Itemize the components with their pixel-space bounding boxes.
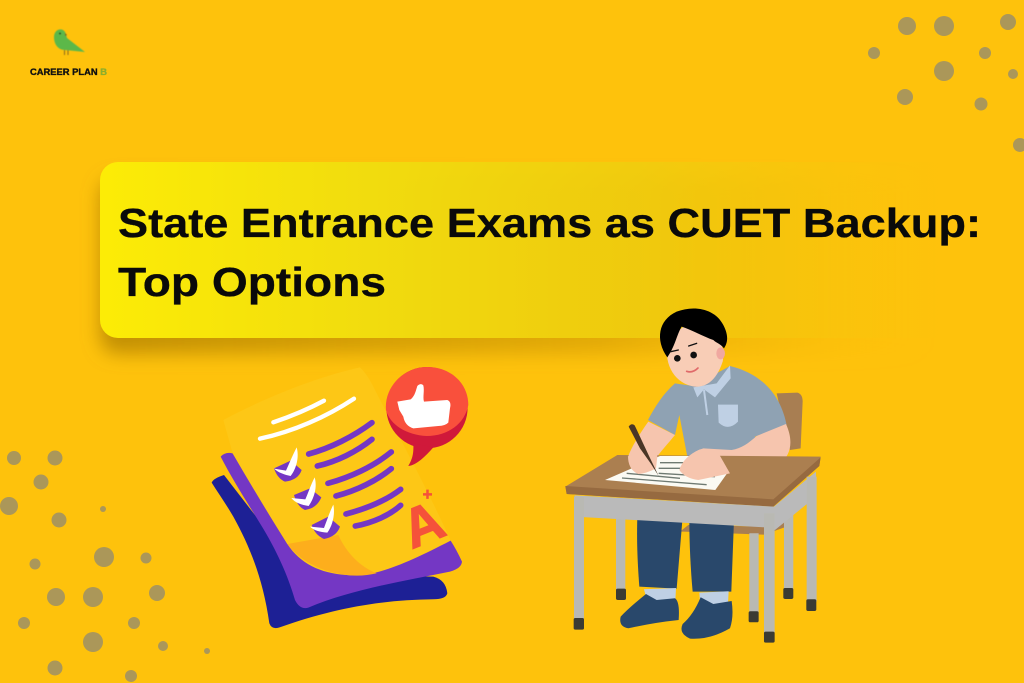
decorative dots: bottom left [0, 450, 210, 682]
panel fill [100, 162, 1000, 338]
paper [605, 456, 727, 490]
illustration: student at desk [565, 308, 821, 643]
legs [620, 517, 734, 639]
logo wordmark: CAREER PLAN B [30, 67, 107, 78]
title [118, 200, 981, 305]
head [667, 323, 723, 387]
title panel [100, 162, 1000, 354]
desk top [565, 455, 821, 507]
back desk leg [616, 513, 625, 590]
left arm [628, 422, 675, 474]
thumbs-up speech bubble [386, 367, 468, 466]
collar [693, 365, 731, 397]
illustration: checklist paper: + [423, 485, 433, 504]
face [671, 343, 698, 372]
chair [680, 393, 803, 622]
letter grade A+: A [393, 488, 453, 561]
pen [629, 424, 659, 476]
sheet fold [287, 535, 377, 576]
title: State Entrance Exams as CUET Backup: [118, 200, 981, 246]
title: Top Options [118, 259, 386, 305]
white heading lines [260, 399, 354, 439]
hair [660, 308, 727, 357]
middle sheet: purple [221, 453, 462, 608]
right arm [680, 424, 790, 480]
desk apron and front legs [575, 472, 816, 530]
front sheet: yellow [223, 367, 451, 575]
right hand [679, 449, 730, 480]
decorative dots: top right [868, 14, 1024, 152]
logo: Career Plan B [30, 29, 107, 78]
shirt [648, 366, 787, 457]
icon: green bird [54, 29, 85, 55]
purple text lines [309, 423, 401, 526]
illustration: checklist paper [212, 367, 468, 628]
checkmarks [274, 447, 340, 539]
pocket [718, 405, 738, 427]
panel shadow [100, 178, 930, 354]
back sheet: navy [212, 475, 447, 628]
thumbs-up icon [397, 384, 450, 428]
left hand [628, 445, 657, 474]
